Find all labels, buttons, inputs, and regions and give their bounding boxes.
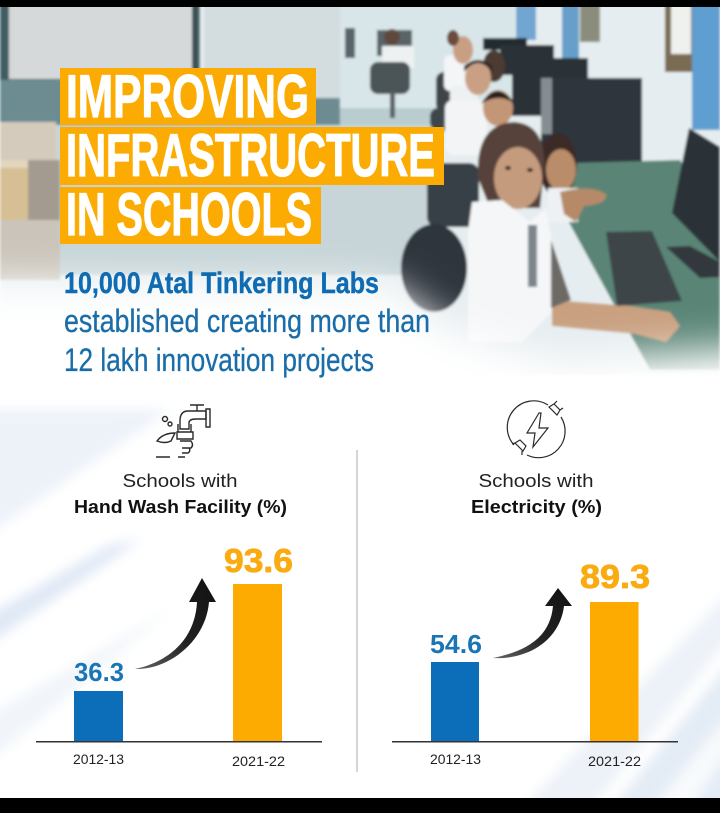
photo: back wall (0, 0, 720, 375)
label: 2012-13: 2012-13 (73, 751, 124, 767)
photo: main girl (468, 122, 680, 342)
photo: row of children (444, 30, 515, 155)
icon: plug circle with bolt (507, 401, 565, 458)
title: improving infrastructure in schools (60, 63, 444, 248)
value: 93.6: 93.6 (224, 542, 293, 579)
arrow: upward growth (135, 578, 216, 669)
title: improving infrastructure in schools: INFRASTRUCTURE (66, 122, 435, 189)
photo: blue curtains and windows (516, 0, 720, 130)
subtitle: atal tinkering labs: 10,000 Atal Tinkering Labs (64, 267, 379, 300)
subtitle: atal tinkering labs (64, 267, 430, 378)
title: improving infrastructure in schools: IN SCHOOLS (66, 181, 312, 248)
value: 89.3: 89.3 (580, 558, 650, 595)
arrow: upward growth (493, 588, 572, 658)
icon: tap and washing hands (156, 405, 210, 457)
value: 36.3: 36.3 (74, 657, 124, 687)
divider (356, 450, 358, 772)
heading: schools with electricity: Schools with (478, 471, 594, 491)
heading: schools with hand wash facility: Hand Wash Facility (%) (74, 497, 287, 517)
photo: fade to white (0, 260, 720, 376)
bar: 2021-22 (233, 584, 282, 741)
photo: teal wall and whiteboard (0, 0, 515, 133)
panel: electricity (392, 401, 678, 769)
heading: schools with electricity: Electricity (%) (471, 497, 602, 517)
photo: right monitor (666, 128, 720, 278)
subtitle: atal tinkering labs: 12 lakh innovation projects (64, 342, 374, 378)
heading: schools with hand wash facility (74, 471, 287, 517)
label: 2021-22: 2021-22 (232, 753, 285, 769)
photo: computer towers (483, 38, 642, 163)
axis (36, 741, 322, 742)
photo: mid floor behind title (55, 125, 430, 275)
bar: 2012-13 (74, 691, 123, 741)
photo: second girl (539, 133, 606, 222)
panel: hand wash facility (36, 405, 322, 769)
photo: wooden desks at left (0, 122, 60, 280)
heading: schools with hand wash facility: Schools with (122, 471, 238, 491)
label: 2012-13: 2012-13 (430, 751, 481, 767)
photo: classroom with students at computers (0, 7, 720, 371)
photo: green desk (566, 160, 720, 370)
bar: 2012-13 (431, 662, 479, 741)
title: improving infrastructure in schools: IMPROVING (66, 63, 309, 130)
photo: dark chairs (401, 72, 479, 312)
subtitle: atal tinkering labs: established creating more than (64, 303, 430, 339)
background light streaks (0, 410, 720, 810)
value: 54.6: 54.6 (430, 629, 482, 659)
photo: keyboard (606, 231, 682, 306)
heading: schools with electricity (471, 471, 602, 517)
label: 2021-22: 2021-22 (588, 753, 641, 769)
bar: 2021-22 (590, 602, 638, 741)
photo: far boy with monitor (345, 28, 414, 118)
axis (392, 741, 678, 742)
